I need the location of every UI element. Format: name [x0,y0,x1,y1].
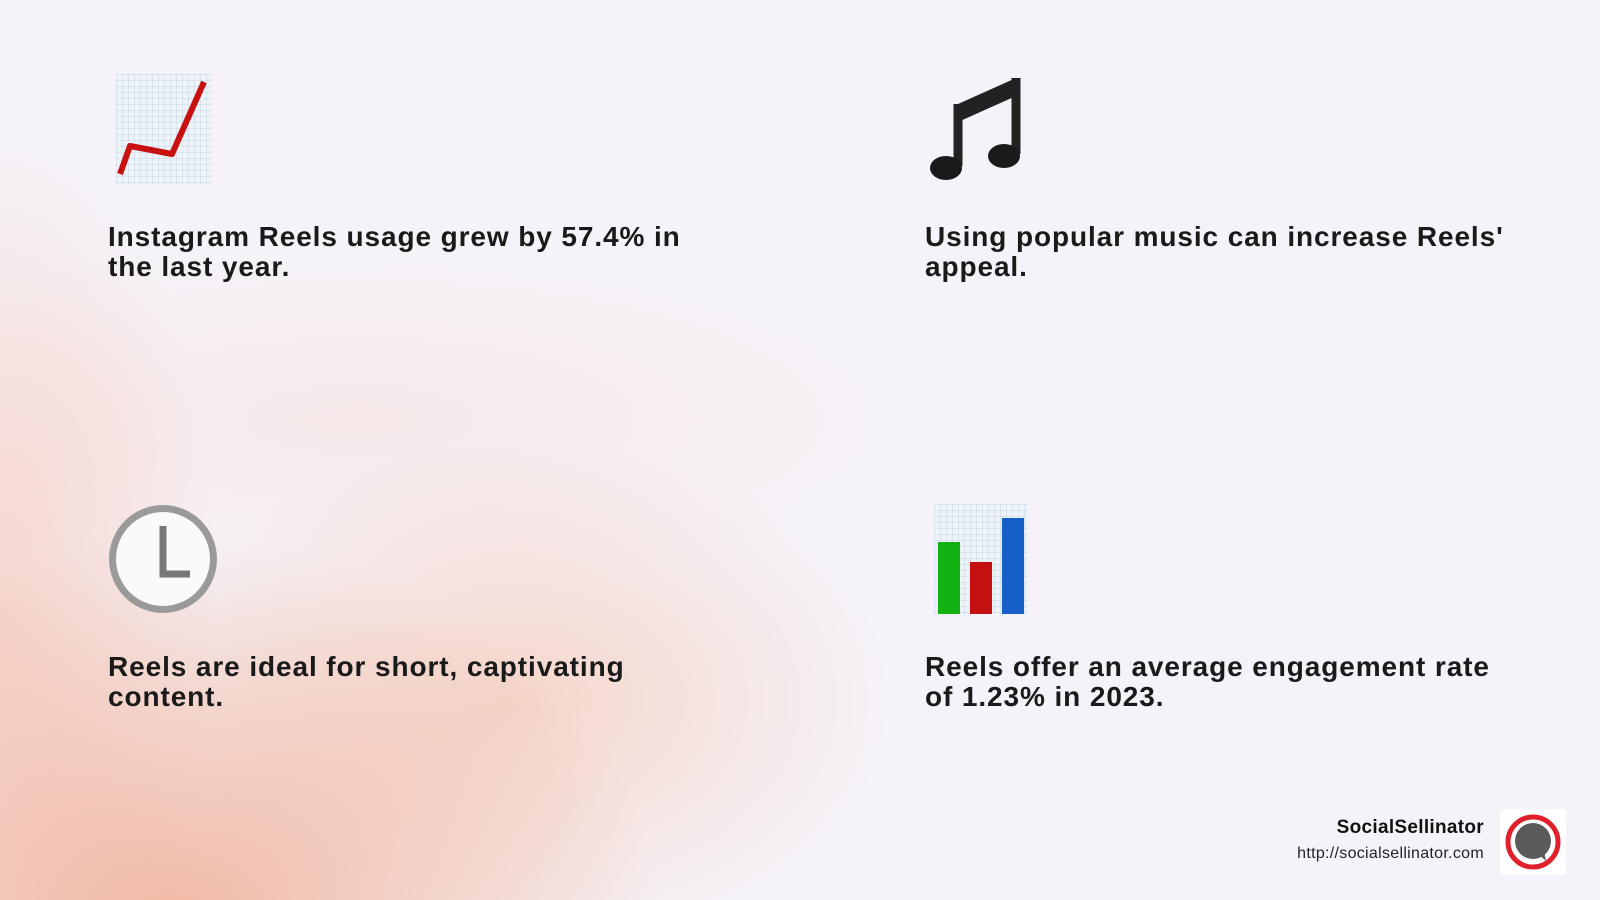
text: reels usage: Instagram Reels usage grew by 57.4% in the last year. [108,221,681,282]
text: popular music: Using popular music can increase Reels' appeal. [925,221,1504,282]
text: short content: Reels are ideal for short, captivating content. [108,651,625,712]
icon: music note [930,78,1020,180]
brand footer [1297,809,1566,875]
brand name: SocialSellinator [1337,817,1484,838]
text: engagement rate: Reels offer an average engagement rate of 1.23% in 2023. [925,651,1490,712]
icon: clock [109,505,217,613]
icon: line chart [116,74,212,184]
brand url: http://socialsellinator.com [1297,845,1484,862]
icon: bar chart [934,504,1028,614]
logo [1500,809,1566,875]
